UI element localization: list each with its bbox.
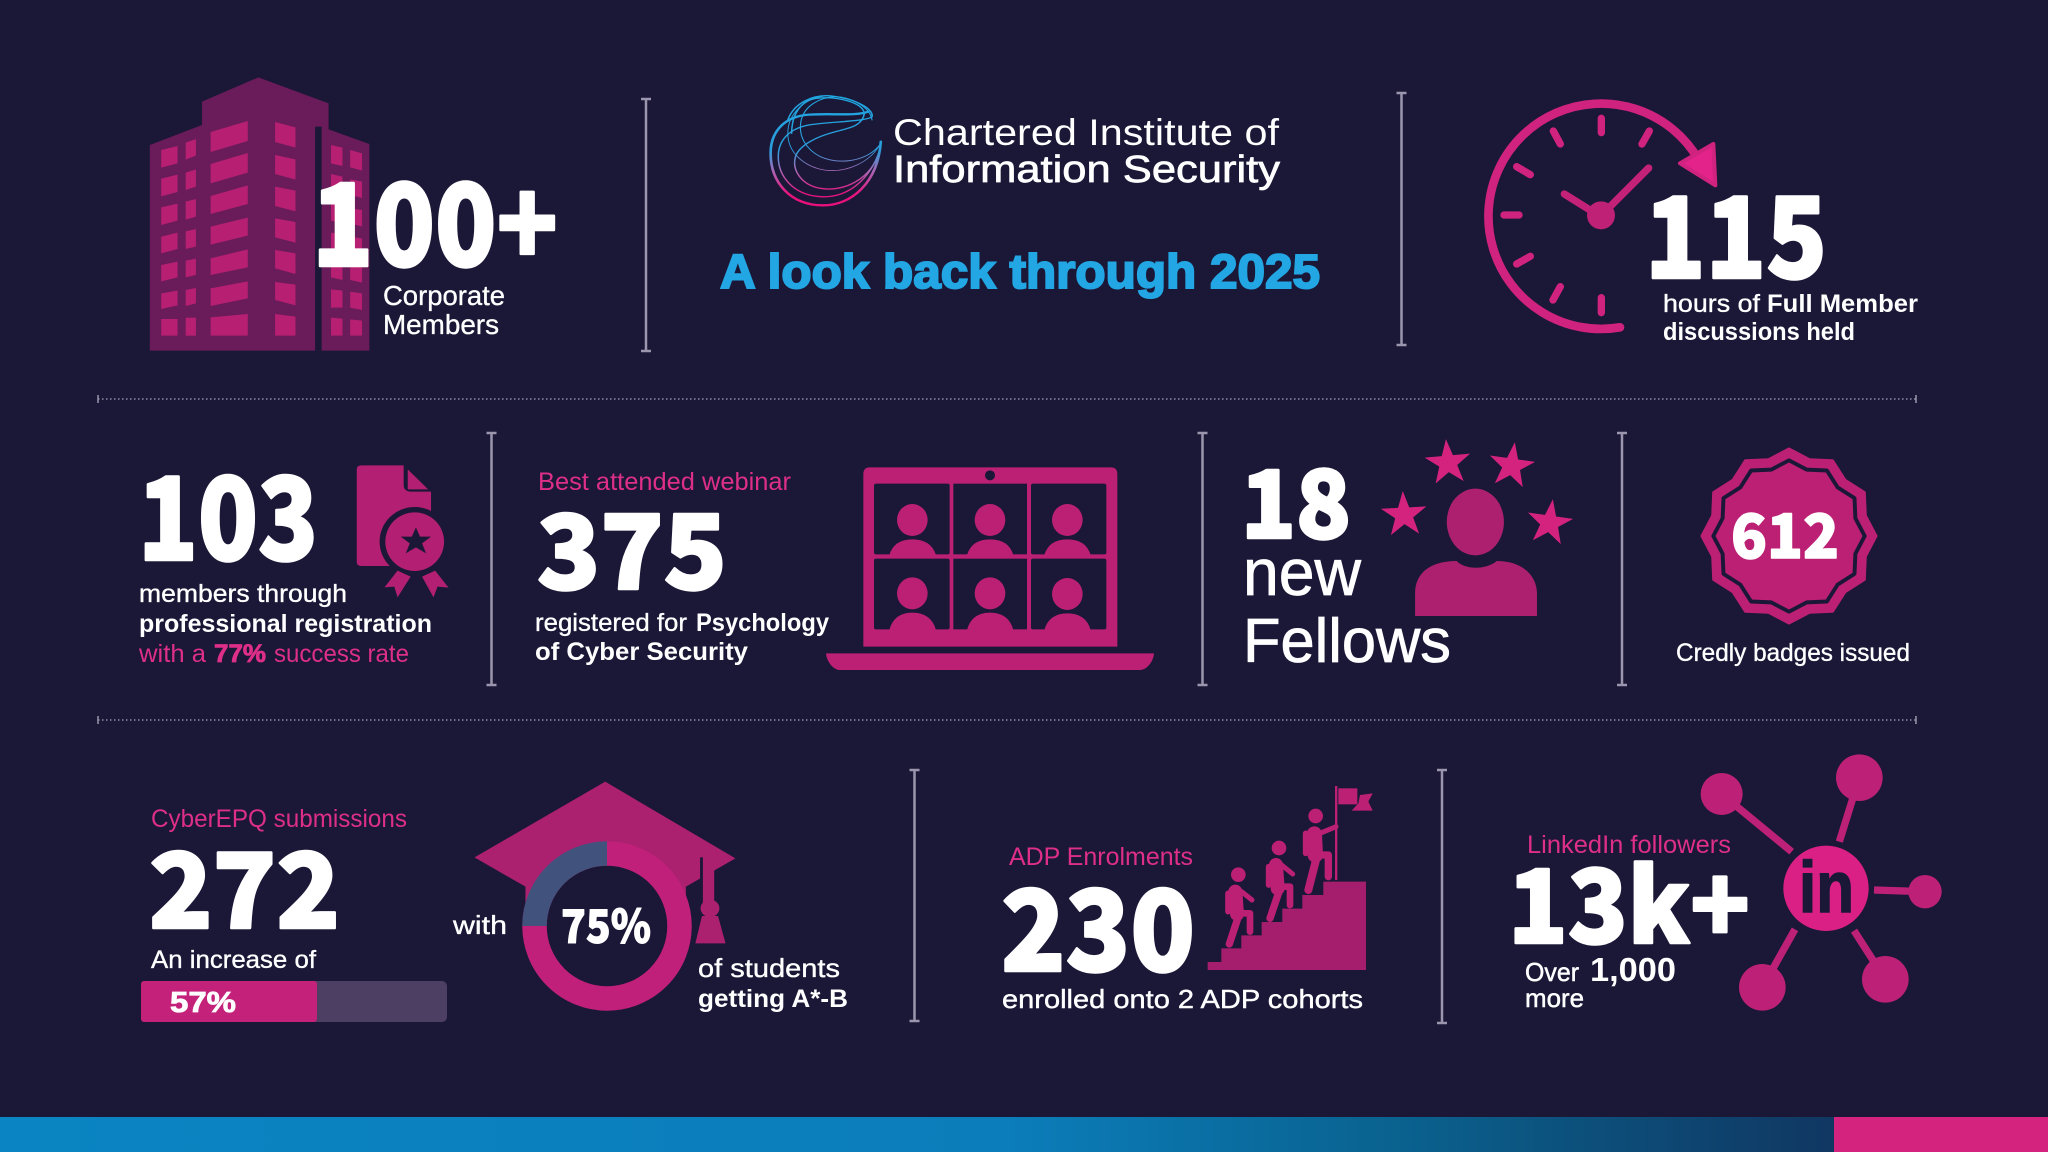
number: 18: 18 (1241, 430, 1351, 566)
icon: people climbing stairs to flag (1208, 786, 1373, 970)
text: of students getting a*-b: getting A*-B (698, 985, 848, 1013)
panel: linkedin followers (1508, 754, 1942, 1013)
progress bar: 57%: 57% (170, 987, 236, 1019)
label: adp enrolments: ADP Enrolments (1009, 843, 1193, 871)
text: hours of full member discussions held (1663, 290, 1918, 346)
number: 103: 103 (138, 428, 318, 594)
number: 272: 272 (149, 807, 340, 958)
number: 230: 230 (1001, 842, 1195, 1004)
text: an increase of: An increase of (151, 946, 316, 974)
panel: new fellows (1241, 430, 1575, 676)
text: corporate members: Corporate (383, 280, 505, 311)
text: 77% success rate: with a (138, 640, 206, 668)
text: new fellows: new (1243, 535, 1361, 609)
panel: corporate members (150, 77, 558, 351)
icon: linkedin network: in (1799, 848, 1854, 928)
logo text: organisation name (893, 112, 1280, 191)
text: corporate members: Members (383, 309, 499, 340)
text: over 1,000 more: Over (1525, 957, 1579, 987)
logo text: organisation name: Information Security (893, 149, 1280, 191)
number: 100+: 100+ (312, 134, 558, 299)
icon: scalloped badge (1702, 449, 1876, 623)
panel: full member discussions (1488, 104, 1918, 346)
icon: certificate with rosette (357, 465, 450, 597)
text: over 1,000 more: 1,000 (1590, 951, 1676, 988)
number: 375: 375 (537, 470, 727, 619)
text: 77% success rate (138, 640, 409, 668)
text: enrolled onto 2 adp cohorts: enrolled onto 2 ADP cohorts (1002, 984, 1363, 1014)
icon: linkedin network (1701, 754, 1942, 1011)
text: of students getting a*-b: of students (698, 953, 840, 983)
text: credly badges issued: Credly badges issued (1676, 639, 1910, 667)
text: members through professional registration: professional registration (139, 610, 432, 638)
donut chart: 75%: 75% (561, 891, 651, 957)
logo text: organisation name: Chartered Institute of (893, 112, 1280, 153)
label: cyberepq submissions: CyberEPQ submissions (151, 805, 407, 833)
text: over 1,000 more (1525, 951, 1676, 1013)
number: 13k+: 13k+ (1508, 826, 1750, 973)
text: of students getting a*-b (698, 953, 848, 1013)
number: 612: 612 (1731, 487, 1839, 576)
text: with: with (452, 910, 507, 940)
text: hours of full member discussions held: Full Member (1767, 290, 1918, 318)
panel: adp enrolments (1001, 786, 1373, 1014)
text: new fellows (1243, 535, 1451, 676)
logo: swirl globe (771, 96, 881, 205)
icon: stars (1380, 437, 1575, 545)
text: corporate members (383, 280, 505, 340)
label: best attended webinar: Best attended webinar (538, 468, 791, 496)
icon: graduation cap (474, 782, 735, 943)
number: 115: 115 (1645, 149, 1827, 311)
panel: best attended webinar (535, 467, 1154, 670)
heading: a look back through 2025: A look back through 2025 (720, 246, 1320, 299)
icon: clock with arrow (1488, 104, 1715, 329)
footer bar (0, 1117, 2048, 1152)
panel: professional registration (138, 428, 450, 668)
panel: header logo and title (720, 96, 1320, 299)
progress bar: 57% (141, 981, 447, 1022)
donut chart: 75% (534, 854, 680, 998)
text: 77% success rate: 77% (214, 640, 266, 668)
text: new fellows: Fellows (1243, 607, 1451, 676)
text: registered for psychology of cyber security (535, 609, 829, 666)
text: members through professional registration: members through (139, 580, 347, 608)
label: linkedin followers: LinkedIn followers (1527, 831, 1731, 859)
text: hours of full member discussions held: discussions held (1663, 318, 1855, 346)
text: registered for psychology of cyber security: of Cyber Security (535, 638, 748, 666)
text: registered for psychology of cyber security: Psychology (696, 609, 829, 637)
icon: person (1415, 489, 1537, 616)
text: registered for psychology of cyber security: registered for (535, 609, 687, 637)
text: members through professional registration (139, 580, 432, 638)
icon: office building (150, 77, 369, 351)
text: hours of full member discussions held: hours of (1663, 290, 1760, 318)
panel: cyberepq submissions (141, 782, 848, 1022)
text: over 1,000 more: more (1525, 983, 1584, 1013)
text: 77% success rate: success rate (274, 640, 409, 668)
icon: laptop video call (826, 467, 1154, 670)
panel: credly badges (1676, 449, 1910, 667)
